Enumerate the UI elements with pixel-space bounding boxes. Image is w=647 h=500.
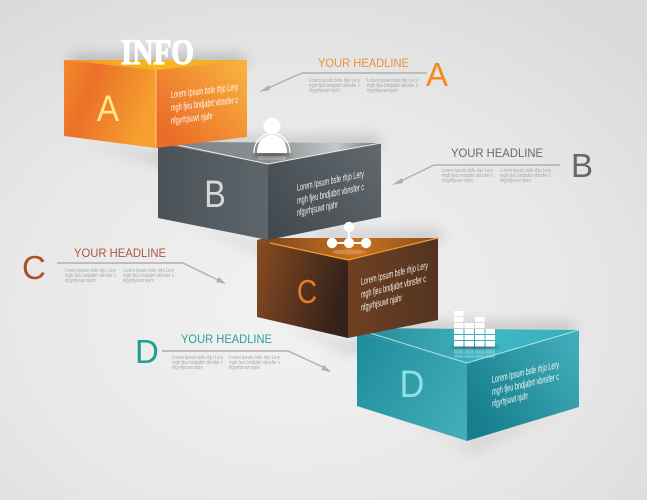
title: INFO: INFO	[121, 32, 194, 72]
box C top face	[257, 238, 438, 260]
box B	[158, 142, 381, 240]
arrow D	[162, 351, 331, 372]
box A	[64, 60, 247, 148]
box D body text	[492, 360, 560, 410]
box C body text: Lorem Ipsum bsfe rhjo Lery	[361, 260, 429, 288]
letter D: D	[135, 333, 159, 370]
small text A: nfgyrhjsuwt njahr	[309, 88, 340, 94]
box D body text: mgh fjeu bndjabrt vbnsfer c	[492, 372, 559, 398]
box A top face	[64, 60, 247, 70]
box D	[357, 328, 579, 441]
box A body text	[171, 82, 238, 127]
box D left face	[357, 333, 467, 441]
box B body text: Lorem Ipsum bsfe rhjo Lery	[297, 169, 365, 194]
box A left face	[64, 60, 156, 148]
box A right face	[156, 60, 247, 148]
small text B: nfgyrhjsuwt njahr	[442, 178, 473, 184]
small text A: mgh fjeu bndjabrt vbnsfer c	[367, 83, 418, 89]
small text D: mgh fjeu bndjabrt vbnsfer c	[229, 360, 280, 366]
icon: equalizer bars	[451, 311, 499, 358]
headline C: YOUR HEADLINE	[74, 246, 166, 260]
small text B	[442, 168, 551, 184]
small text A: nfgyrhjsuwt njahr	[367, 88, 398, 94]
box A body text: nfgyrhjsuwt njahr	[171, 111, 213, 127]
box C body text	[361, 260, 429, 314]
box D top face	[357, 328, 579, 363]
arrow C	[57, 263, 226, 284]
callout A	[259, 56, 448, 94]
small text C	[65, 268, 174, 284]
small text A: mgh fjeu bndjabrt vbnsfer c	[309, 83, 360, 89]
small text B: nfgyrhjsuwt njahr	[500, 178, 531, 184]
box A highlight edges	[155, 70, 157, 147]
box B letter: B	[204, 174, 226, 216]
small text D: nfgyrhjsuwt njahr	[229, 365, 260, 371]
box B body text	[297, 169, 365, 219]
letter A: A	[426, 56, 448, 93]
letter C: C	[22, 249, 46, 286]
arrow A	[259, 73, 427, 92]
small text B: mgh fjeu bndjabrt vbnsfer c	[442, 173, 493, 179]
box B right face	[268, 143, 381, 240]
box A body text: Lorem Ipsum bsfe rhjo Lery	[171, 82, 238, 101]
small text A: Lorem Ipsum bsfe rhjo Lery	[309, 78, 360, 84]
box A letter: A	[97, 88, 120, 129]
box D body text: nfgyrhjsuwt njahr	[492, 391, 528, 410]
box B body text: mgh fjeu bndjabrt vbnsfer c	[297, 182, 364, 207]
small text A	[309, 78, 418, 94]
box C body text: nfgyrhjsuwt njahr	[361, 293, 402, 314]
callout B	[392, 146, 593, 185]
box C	[257, 238, 438, 338]
box C left face	[257, 240, 348, 338]
box C letter: C	[297, 274, 317, 311]
box D highlight edges	[370, 330, 579, 363]
box B top face	[158, 142, 381, 164]
small text C: Lorem Ipsum bsfe rhjo Lery	[65, 268, 116, 274]
box D letter: D	[400, 362, 424, 405]
icon: person	[253, 118, 291, 160]
small text C: nfgyrhjsuwt njahr	[65, 278, 96, 284]
small text D: nfgyrhjsuwt njahr	[172, 365, 203, 371]
small text D	[172, 355, 280, 371]
small text C: mgh fjeu bndjabrt vbnsfer c	[65, 273, 116, 279]
small text D: mgh fjeu bndjabrt vbnsfer c	[172, 360, 223, 366]
box C right face	[348, 238, 438, 338]
box C highlight edges	[270, 238, 438, 260]
small text A: Lorem Ipsum bsfe rhjo Lery	[367, 78, 418, 84]
small text D: Lorem Ipsum bsfe rhjo Lery	[172, 355, 223, 361]
letter B: B	[571, 147, 593, 184]
small text C: nfgyrhjsuwt njahr	[123, 278, 154, 284]
headline D: YOUR HEADLINE	[181, 332, 272, 346]
small text B: Lorem Ipsum bsfe rhjo Lery	[442, 168, 493, 174]
arrow B	[392, 165, 560, 185]
callout C	[22, 246, 226, 286]
small text B: Lorem Ipsum bsfe rhjo Lery	[500, 168, 551, 174]
small text C: mgh fjeu bndjabrt vbnsfer c	[123, 273, 174, 279]
callout D	[135, 332, 331, 372]
box D right face	[467, 330, 579, 441]
drop shadows	[70, 56, 575, 450]
headline A: YOUR HEADLINE	[318, 56, 409, 70]
box B left face	[158, 143, 268, 240]
small text C: Lorem Ipsum bsfe rhjo Lery	[123, 268, 174, 274]
small text B: mgh fjeu bndjabrt vbnsfer c	[500, 173, 551, 179]
box B body text: nfgyrhjsuwt njahr	[297, 199, 338, 219]
small text D: Lorem Ipsum bsfe rhjo Lery	[229, 355, 280, 361]
box D body text: Lorem Ipsum bsfe rhjo Lery	[492, 360, 560, 386]
icon: network nodes	[327, 222, 371, 254]
box A body text: mgh fjeu bndjabrt vbnsfer c	[171, 95, 238, 114]
box B highlight edges	[178, 143, 381, 164]
headline B: YOUR HEADLINE	[451, 146, 543, 160]
box C body text: mgh fjeu bndjabrt vbnsfer c	[361, 274, 426, 301]
